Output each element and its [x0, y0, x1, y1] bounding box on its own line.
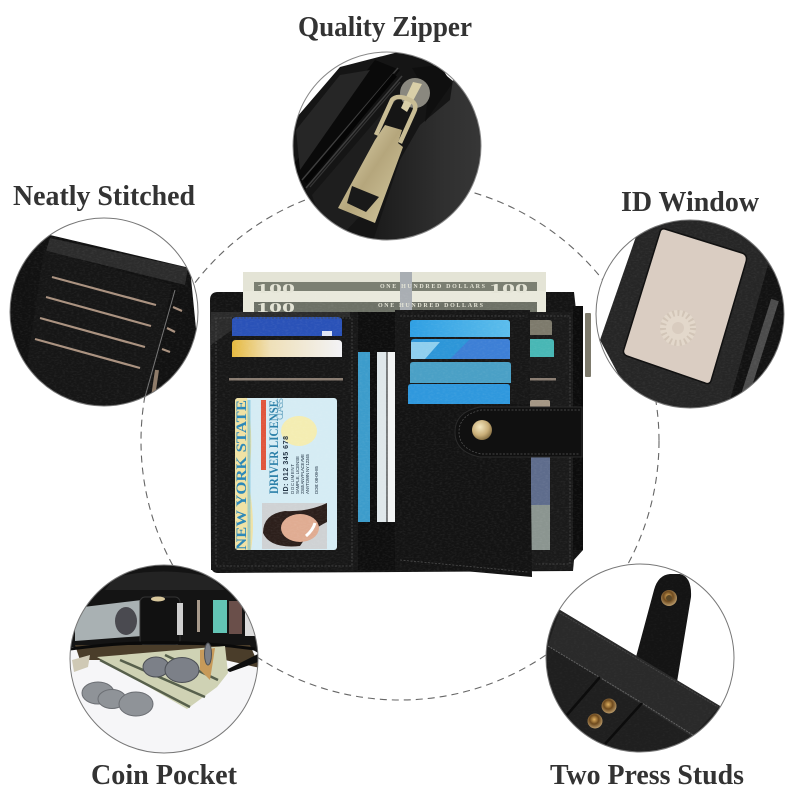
leather body [380, 80, 480, 240]
panel: two press studs [546, 564, 744, 784]
front pocket [395, 404, 532, 577]
card slot 3 [410, 362, 511, 383]
ID window detail circle [600, 220, 784, 408]
card: blue [232, 317, 342, 336]
sunburst watermark [660, 310, 696, 346]
heading: coin pocket: Coin Pocket [91, 759, 237, 791]
card slot 2 [411, 339, 510, 359]
card slot 4 [408, 384, 510, 405]
wallet body [210, 292, 583, 573]
card slot 1 [410, 320, 510, 337]
panel: coin pocket [70, 564, 258, 784]
card: grey [530, 320, 552, 335]
press studs detail circle [546, 567, 720, 752]
licence portrait [262, 503, 327, 549]
central wallet [210, 272, 591, 578]
card: yellow and white [232, 340, 342, 357]
coins in pocket [143, 643, 212, 682]
strap [455, 407, 582, 457]
press stud 1 [602, 698, 616, 714]
slot line [530, 378, 556, 380]
inner cards [177, 600, 255, 636]
coins on table [82, 682, 153, 716]
panel: neatly stitched [10, 185, 198, 406]
folded banknotes [97, 646, 228, 709]
ID window with driver licence: CLASS [275, 398, 285, 420]
card pockets [293, 60, 404, 196]
ID window with driver licence: NEW YORK STATE [234, 400, 250, 550]
centre pockets [358, 312, 395, 570]
white card strips [377, 352, 395, 522]
leather texture [210, 292, 584, 578]
wallet strap [140, 596, 180, 645]
slot line [229, 378, 343, 380]
panel: quality zipper [292, 16, 482, 240]
zipper slider [400, 78, 430, 108]
panel: ID window [596, 191, 784, 408]
zipper pull tab [338, 125, 403, 223]
heading: neatly stitched: Neatly Stitched [13, 180, 195, 212]
strap [636, 574, 691, 682]
stitched detail circle [10, 235, 196, 406]
zipper [573, 306, 591, 550]
snap button [472, 420, 492, 440]
left panel [211, 312, 358, 570]
ID window with driver licence: DRIVER LICENSE [267, 400, 281, 494]
banknotes: ONE HUNDRED DOLLARS [380, 284, 486, 290]
pocket seams [567, 677, 642, 744]
banknotes [243, 272, 546, 316]
heading: two press studs: Two Press Studs [550, 759, 744, 791]
banknotes: 100 [256, 282, 295, 297]
wallet flap [546, 610, 720, 752]
zipper detail circle [294, 52, 480, 240]
photo window [531, 455, 550, 550]
back right panel [530, 312, 573, 570]
zipper teeth [312, 110, 385, 232]
ID window with driver licence: ANYTOWN NY 12345 [305, 454, 310, 494]
ID window with driver licence: DOCUMENT [290, 464, 295, 494]
strap snap [661, 590, 677, 606]
ID window with driver licence: 2345 ANYPLACE AVE [300, 454, 305, 494]
ID window with driver licence: ID: 012 345 678 [283, 436, 290, 494]
wallet stitching [216, 316, 570, 572]
open coin pocket [75, 645, 260, 668]
zipper loop [376, 97, 415, 143]
blue card strip [358, 352, 370, 522]
banknotes: 100 [256, 301, 295, 316]
ID window with driver licence: DOB: 08-09-85 [314, 466, 319, 494]
coin pocket detail circle [70, 566, 258, 752]
stitch lines [548, 613, 718, 737]
heading: quality zipper: Quality Zipper [298, 11, 472, 43]
clear ID window [623, 229, 746, 384]
banknotes: ONE HUNDRED DOLLARS [378, 303, 484, 309]
banknotes: 100 [489, 282, 528, 297]
zip pull [72, 655, 90, 672]
press stud 2 [588, 714, 602, 728]
card slot lines [35, 277, 182, 368]
tan edge [153, 370, 157, 397]
dashed connector circle [141, 182, 659, 700]
card: tan [530, 400, 550, 410]
heading: ID window: ID Window [621, 186, 759, 218]
stitching [143, 290, 175, 404]
ID window with driver licence: SAMPLE, LICENSE [295, 456, 300, 494]
ID window with driver licence [234, 398, 337, 550]
wallet window [75, 600, 142, 641]
right panel [395, 310, 530, 410]
card: teal [530, 339, 554, 357]
